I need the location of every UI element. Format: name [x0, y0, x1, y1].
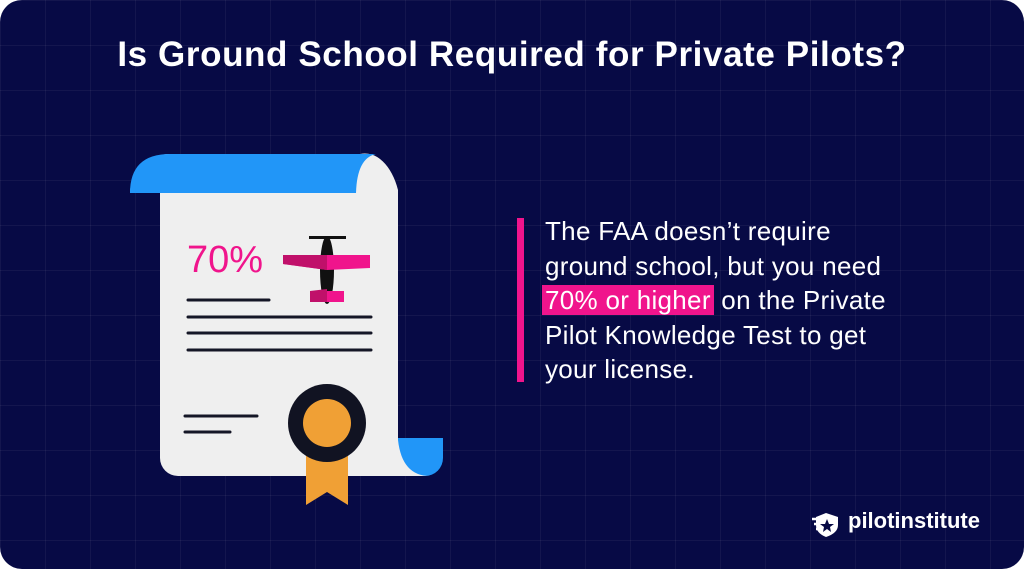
logo	[812, 508, 980, 537]
icon: airplane	[283, 236, 370, 304]
70% label: 70%	[187, 239, 263, 281]
text block with accent bar: your license.	[545, 354, 695, 384]
text block with accent bar	[517, 218, 964, 382]
text block with accent bar: Pilot Knowledge Test to get	[545, 320, 866, 350]
logo: pilotinstitute	[848, 508, 980, 533]
text lines	[185, 300, 371, 432]
text block with accent bar: 70% or higher on the Private	[545, 285, 886, 315]
text block with accent bar: ground school, but you need	[545, 250, 881, 280]
scroll paper	[130, 153, 443, 476]
text block with accent bar: The FAA doesn’t require	[545, 216, 831, 246]
title: Is Ground School Required for Private Pilots?	[117, 35, 907, 74]
icon: seal with ribbon	[288, 384, 366, 505]
